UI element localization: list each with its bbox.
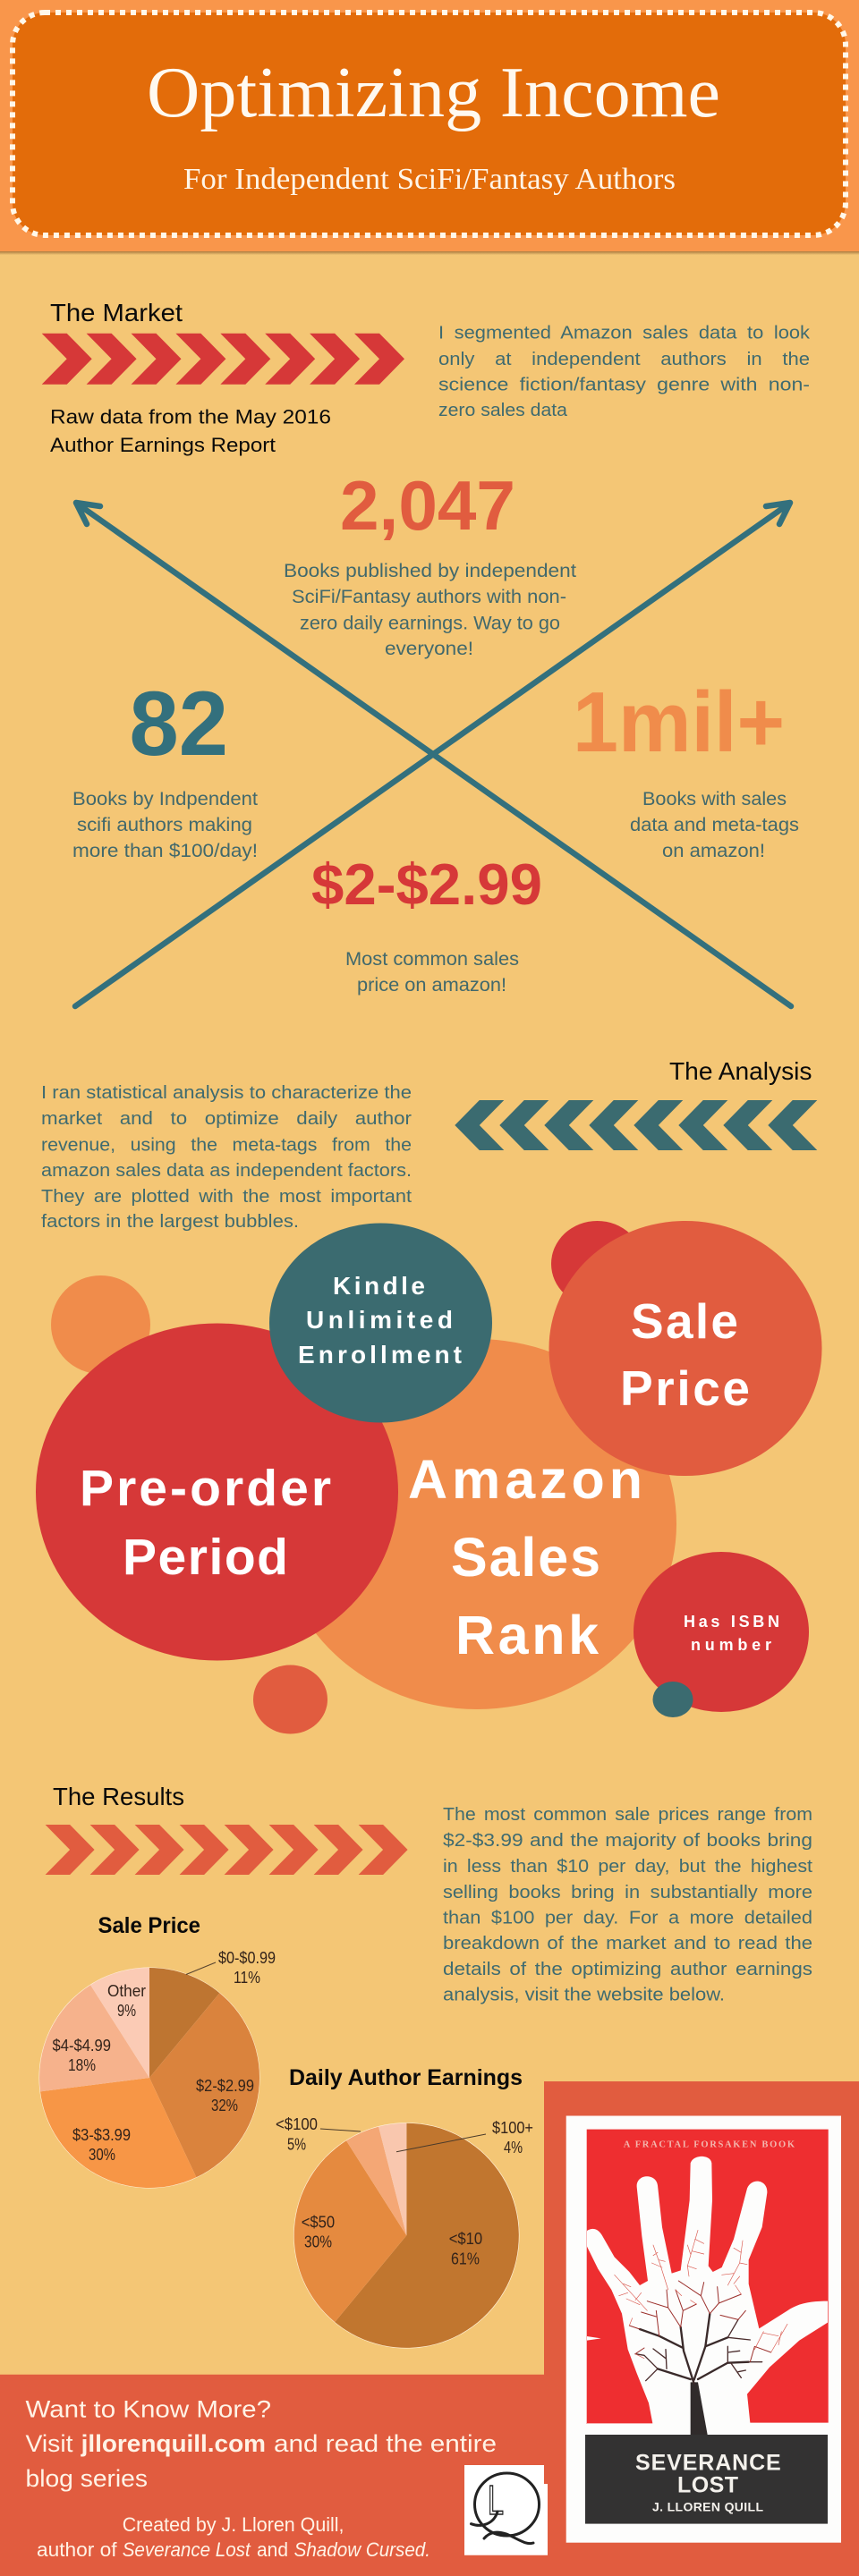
- analysis description: [41, 1083, 412, 1232]
- cover title block: J. LLOREN QUILL: [652, 2500, 763, 2514]
- stat: 1mil+: on amazon!: [662, 841, 765, 861]
- bubble: kindle unlimited enrollment: [269, 1224, 492, 1422]
- pie chart: daily author earnings: 61%: [451, 2250, 480, 2268]
- stat: 2,047: everyone!: [385, 639, 473, 659]
- stat: 82: 82: [129, 673, 228, 775]
- heading: the results: The Results: [53, 1783, 184, 1810]
- stat: 2,047: [284, 466, 576, 659]
- cover title block: LOST: [677, 2472, 738, 2497]
- results description: The most common sale prices range from: [443, 1805, 812, 1825]
- chevron arrows: red: [42, 334, 404, 385]
- pie chart: daily author earnings: 30%: [304, 2233, 332, 2251]
- chart title: Daily Author Earnings: [289, 2065, 523, 2090]
- results description: in less than $10 per day, but the highest: [443, 1857, 812, 1877]
- analysis description: I ran statistical analysis to characterize the: [41, 1083, 412, 1103]
- icon: author logo: L: [488, 2477, 504, 2523]
- market description: only at independent authors in the: [438, 350, 810, 369]
- market description: [438, 324, 811, 420]
- bubble: amazon sales rank: Sales: [451, 1527, 600, 1588]
- bubble: has isbn number: Has ISBN: [684, 1613, 779, 1631]
- source note: Author Earnings Report: [50, 434, 276, 456]
- stat: 1mil+: [573, 674, 799, 861]
- pie chart: daily author earnings: 4%: [504, 2139, 523, 2157]
- pie chart: sale price: $4-$4.99: [52, 2037, 111, 2055]
- pie chart: sale price: 30%: [89, 2146, 115, 2164]
- bubble: pre-order period: [36, 1324, 398, 1660]
- call to action text: and read the entire: [274, 2430, 497, 2457]
- author credit: Created by J. Lloren Quill,: [123, 2513, 344, 2536]
- pie chart: sale price: 32%: [211, 2097, 238, 2114]
- analysis description: They are plotted with the most important: [41, 1187, 412, 1207]
- cover series line: A FRACTAL FORSAKEN BOOK: [624, 2140, 795, 2150]
- author credit: and: [257, 2538, 288, 2561]
- call to action text: [25, 2396, 497, 2492]
- stat: price: Most common sales: [345, 949, 519, 970]
- pie chart: sale price: $3-$3.99: [72, 2126, 131, 2144]
- stat: 1mil+: data and meta-tags: [630, 815, 799, 835]
- bubble: amazon sales rank: Rank: [455, 1605, 599, 1665]
- small coral bubble: [253, 1665, 327, 1733]
- red cover field: [587, 2130, 829, 2424]
- small teal bubble: [653, 1682, 693, 1717]
- author credit: Severance Lost: [123, 2538, 251, 2561]
- cover title block: SEVERANCE: [635, 2451, 781, 2476]
- results description: analysis, visit the website below.: [443, 1986, 725, 2005]
- stat: price: $2-$2.99: [311, 852, 542, 917]
- call to action text: Want to Know More?: [25, 2396, 271, 2423]
- crossed arrows: [75, 503, 791, 1006]
- small red bubble: [551, 1221, 643, 1307]
- pie chart: sale price: 18%: [68, 2056, 96, 2074]
- header banner: [0, 0, 859, 255]
- stat: 82: more than $100/day!: [72, 841, 258, 861]
- results description: [443, 1805, 812, 2005]
- results description: $2-$3.99 and the majority of books bring: [443, 1831, 812, 1851]
- heading: the analysis: The Analysis: [669, 1057, 812, 1085]
- call to action text: Visit: [25, 2430, 73, 2457]
- stat: 82: scifi authors making: [77, 815, 252, 835]
- market description: science fiction/fantasy genre with non-: [438, 375, 810, 394]
- stat: 1mil+: Books with sales: [642, 789, 787, 809]
- bubble: kindle unlimited enrollment: Unlimited: [306, 1306, 453, 1334]
- source note: [50, 405, 331, 456]
- tree trunk: [691, 2382, 708, 2435]
- bubble: sale price: [549, 1221, 821, 1476]
- market description: zero sales data: [438, 401, 568, 420]
- source note: Raw data from the May 2016: [50, 405, 331, 428]
- bubble: pre-order period: Pre-order: [80, 1460, 331, 1517]
- cover title block: [585, 2435, 828, 2524]
- bubble: has isbn number: [634, 1552, 809, 1712]
- stat: 1mil+: 1mil+: [573, 674, 785, 770]
- pie chart: sale price: [39, 1913, 276, 2188]
- section: the analysis: [41, 1057, 817, 1232]
- pie chart: daily author earnings: <$10: [449, 2230, 482, 2248]
- pie chart: sale price: Other: [107, 1982, 146, 2000]
- book cover: [566, 2116, 841, 2543]
- bubble chart: [36, 1221, 821, 1733]
- pie chart: daily author earnings: $100+: [492, 2119, 533, 2137]
- section: the market: [42, 299, 811, 456]
- pie chart: sale price: $0-$0.99: [218, 1949, 276, 1967]
- section: the results: [46, 1783, 812, 2005]
- pie chart: sale price: 9%: [117, 2002, 136, 2020]
- bubble: sale price: Sale: [631, 1293, 738, 1349]
- pie chart: daily author earnings: 5%: [287, 2136, 306, 2154]
- chevron arrows: coral: [46, 1825, 408, 1875]
- call to action text: jllorenquill.com: [81, 2430, 266, 2457]
- bubble: kindle unlimited enrollment: Enrollment: [298, 1341, 462, 1368]
- call to action text: blog series: [25, 2465, 148, 2492]
- subtitle: For Independent SciFi/Fantasy Authors: [183, 163, 676, 196]
- pie chart: sale price: $2-$2.99: [196, 2077, 254, 2095]
- stat: 82: Books by Indpendent: [72, 789, 258, 809]
- stat: 2,047: 2,047: [340, 466, 515, 545]
- bubble: amazon sales rank: [277, 1339, 676, 1709]
- analysis description: amazon sales data as independent factors.: [41, 1161, 412, 1181]
- title: Optimizing Income: [147, 54, 720, 132]
- chart title: Sale Price: [98, 1913, 200, 1938]
- stat: 2,047: Books published by independent: [284, 561, 576, 581]
- author credit: [37, 2513, 430, 2561]
- results description: details of the optimizing author earnings: [443, 1960, 812, 1979]
- bubble: sale price: Price: [620, 1360, 750, 1416]
- bubble: amazon sales rank: Amazon: [408, 1449, 642, 1510]
- market description: I segmented Amazon sales data to look: [438, 324, 811, 343]
- icon: author logo: [464, 2465, 548, 2555]
- chevron arrows: teal: [455, 1100, 817, 1150]
- analysis description: market and to optimize daily author: [41, 1109, 412, 1129]
- bubble: kindle unlimited enrollment: Kindle: [333, 1272, 425, 1300]
- tree branches: [615, 2230, 787, 2384]
- panel: call to action footer: [0, 2081, 859, 2576]
- results description: breakdown of the market and to read the: [443, 1934, 812, 1953]
- stat: price: price on amazon!: [357, 975, 506, 996]
- icon: white hand with tree: [587, 2157, 829, 2435]
- small orange bubble: [51, 1275, 150, 1374]
- author credit: author of: [37, 2538, 118, 2561]
- pie chart: sale price: 11%: [234, 1969, 260, 1987]
- stat: 2,047: zero daily earnings. Way to go: [300, 613, 560, 633]
- author credit: Shadow Cursed.: [294, 2538, 430, 2561]
- results description: selling books bring in substantially more: [443, 1883, 812, 1902]
- stat: 2,047: SciFi/Fantasy authors with non-: [292, 587, 566, 607]
- results description: than $100 per day. For a more detailed: [443, 1909, 812, 1928]
- pie chart: daily author earnings: <$100: [276, 2115, 318, 2133]
- bubble: has isbn number: number: [691, 1636, 771, 1654]
- stat: price: [311, 852, 542, 996]
- heading: the market: The Market: [50, 299, 183, 326]
- analysis description: factors in the largest bubbles.: [41, 1212, 299, 1232]
- analysis description: revenue, using the meta-tags from the: [41, 1135, 412, 1155]
- stat: 82: [72, 673, 258, 861]
- pie chart: daily author earnings: [276, 2065, 533, 2349]
- pie chart: daily author earnings: <$50: [302, 2214, 335, 2232]
- bubble: pre-order period: Period: [123, 1529, 288, 1586]
